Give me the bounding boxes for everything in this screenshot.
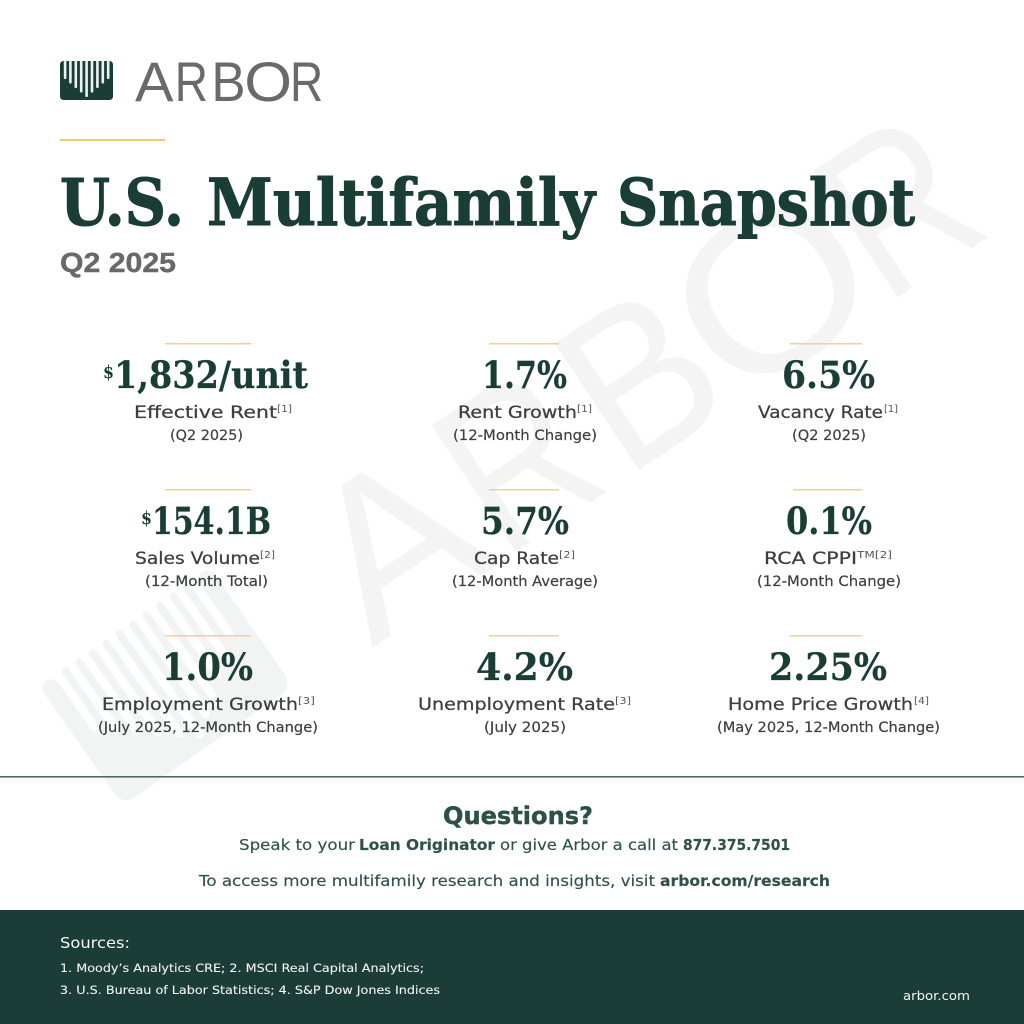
logo: ARBOR wordmark: O xyxy=(244,51,292,113)
stat: RCA CPPI: TM[2] xyxy=(856,550,892,561)
stat: RCA CPPI: (12-Month Change) xyxy=(757,574,901,590)
call to action: Loan Originator xyxy=(359,836,495,854)
watermark: ARBOR wordmark: O xyxy=(623,135,918,446)
watermark: ARBOR wordmark: B xyxy=(514,237,764,518)
stat: cap rate: Cap Rate xyxy=(474,549,559,568)
title: Multifamily xyxy=(207,165,597,241)
footer band: 3. U.S. Bureau of Labor Statistics; 4. S&P Dow Jones Indices xyxy=(60,983,440,997)
subtitle: Q2 2025 xyxy=(60,247,176,278)
stat: unemployment rate: 4.2% xyxy=(476,645,573,689)
stat: employment growth: [3] xyxy=(298,696,315,707)
stat: effective rent: $ xyxy=(103,362,114,383)
stat: unemployment rate: [3] xyxy=(615,696,631,707)
call to action: arbor.com/research xyxy=(660,872,830,890)
stat: sales volume: (12-Month Total) xyxy=(145,574,268,590)
stat: rent growth: 1.7% xyxy=(482,353,567,397)
title: U.S. xyxy=(60,165,184,241)
stat: effective rent xyxy=(103,343,308,444)
stat: unemployment rate xyxy=(418,635,631,736)
stat: vacancy rate: [1] xyxy=(884,404,898,415)
logo: Arbor icon xyxy=(60,60,113,100)
logo: ARBOR wordmark: R xyxy=(290,51,323,113)
stat: sales volume: 154.1B xyxy=(152,499,271,543)
logo: ARBOR wordmark: A xyxy=(135,51,173,113)
stat: cap rate: (12-Month Average) xyxy=(452,574,598,590)
logo: ARBOR wordmark: R xyxy=(175,51,208,113)
stat: employment growth: 1.0% xyxy=(162,645,253,689)
footer band xyxy=(0,910,1024,1024)
stat: sales volume: [2] xyxy=(260,550,275,561)
stat: home price growth: 2.25% xyxy=(769,645,887,689)
stat: sales volume xyxy=(135,489,275,590)
logo: ARBOR wordmark: B xyxy=(211,51,246,113)
watermark: ARBOR wordmark xyxy=(261,66,1021,687)
stat: employment growth xyxy=(98,635,318,736)
stat: rent growth: [1] xyxy=(577,404,592,415)
stat: home price growth xyxy=(717,635,940,736)
stat: vacancy rate: 6.5% xyxy=(782,353,875,397)
call to action: To access more multifamily research and insights, visit xyxy=(198,872,655,890)
stat: vacancy rate: Vacancy Rate xyxy=(758,403,883,422)
stat: home price growth: [4] xyxy=(914,696,929,707)
title: Snapshot xyxy=(617,165,915,241)
stat: sales volume: Sales Volume xyxy=(135,549,260,568)
stat: home price growth: Home Price Growth xyxy=(728,695,913,714)
stat: RCA CPPI xyxy=(757,489,901,590)
watermark: ARBOR wordmark: A xyxy=(261,397,525,687)
stat: cap rate: 5.7% xyxy=(481,499,569,543)
stat: employment growth: (July 2025, 12-Month Change) xyxy=(98,720,318,736)
call to action: Questions? xyxy=(443,802,593,830)
logo: ARBOR wordmark xyxy=(135,51,323,113)
stat: RCA CPPI: RCA CPPI xyxy=(764,549,857,568)
accent rule under logo xyxy=(60,139,165,141)
stat: effective rent: Effective Rent xyxy=(134,403,278,422)
title xyxy=(60,165,915,241)
stat: vacancy rate xyxy=(758,343,898,444)
stat: employment growth: Employment Growth xyxy=(102,695,298,714)
footer band: arbor.com xyxy=(903,988,970,1003)
call to action: Speak to your xyxy=(239,836,356,854)
watermark: ARBOR wordmark: R xyxy=(392,321,639,599)
stat: RCA CPPI: 0.1% xyxy=(786,499,872,543)
stat: unemployment rate: (July 2025) xyxy=(484,720,566,736)
stat: vacancy rate: (Q2 2025) xyxy=(792,428,866,444)
stat: effective rent: 1,832/unit xyxy=(114,353,308,397)
call to action: or give Arbor a call at xyxy=(500,836,678,854)
stat: unemployment rate: Unemployment Rate xyxy=(418,695,615,714)
stat: home price growth: (May 2025, 12-Month Change) xyxy=(717,720,940,736)
footer band: 1. Moody’s Analytics CRE; 2. MSCI Real Capital Analytics; xyxy=(60,961,424,975)
section divider xyxy=(0,776,1024,778)
stat: effective rent: (Q2 2025) xyxy=(170,428,243,444)
stat: cap rate: [2] xyxy=(559,550,575,561)
stat: cap rate xyxy=(452,489,598,590)
stat: rent growth: Rent Growth xyxy=(458,403,577,422)
stat: rent growth xyxy=(453,343,597,444)
stat: sales volume: $ xyxy=(141,508,152,529)
call to action: 877.375.7501 xyxy=(683,836,790,854)
watermark: tilted logo mark xyxy=(39,567,293,806)
footer band: Sources: xyxy=(60,934,130,952)
stat: rent growth: (12-Month Change) xyxy=(453,428,597,444)
call to action xyxy=(198,802,830,890)
stat: effective rent: [1] xyxy=(277,404,292,415)
